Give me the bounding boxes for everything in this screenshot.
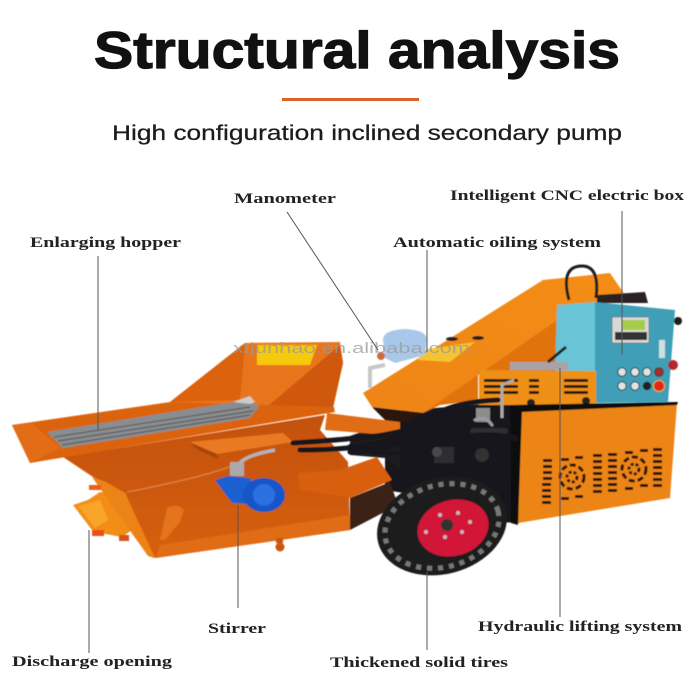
leader lines [89,211,622,653]
machine: automatic oiling cup [370,329,427,388]
control buttons [618,368,664,392]
machine: hopper grate [47,396,260,448]
machine: rear orange bracket [325,413,400,434]
title accent rule [282,98,419,101]
machine: concrete pump [12,266,682,589]
label: Discharge opening: Discharge opening [12,654,173,670]
label: Stirrer: Stirrer [208,621,266,637]
subtitle: High configuration inclined secondary pump [112,122,622,145]
machine: hopper upper chute [170,342,343,418]
label: Manometer: Manometer [234,191,336,207]
label: Hydraulic lifting system: Hydraulic lifting system [478,619,683,635]
machine rear: black engine bay [350,402,520,530]
label: Enlarging hopper: Enlarging hopper [30,235,181,251]
machine: boom arm [363,273,625,422]
machine: hydraulic hoses [293,400,515,453]
machine: solid tire with red hub [366,463,518,589]
control panel display [612,317,649,343]
icon: fan left [560,465,584,489]
machine: vented orange panel [510,402,678,525]
machine: blue stirrer motor [215,450,285,512]
machine: small yellow control housing [479,347,596,418]
title: Structural analysis [94,22,620,80]
machine: electric box [555,302,682,403]
label: Intelligent CNC electric box: Intelligent CNC electric box [450,188,685,204]
label: Thickened solid tires: Thickened solid tires [330,655,508,671]
machine: hopper rim [12,402,335,463]
machine: hopper body [63,415,392,558]
watermark: xtjunhao.en.alibaba.com [233,340,470,357]
machine: side shelf [190,433,293,459]
label: Automatic oiling system: Automatic oiling system [393,235,602,251]
machine: discharge opening [73,477,155,558]
machine: handle loop and cap [566,266,648,303]
icon: fan right [622,457,646,481]
